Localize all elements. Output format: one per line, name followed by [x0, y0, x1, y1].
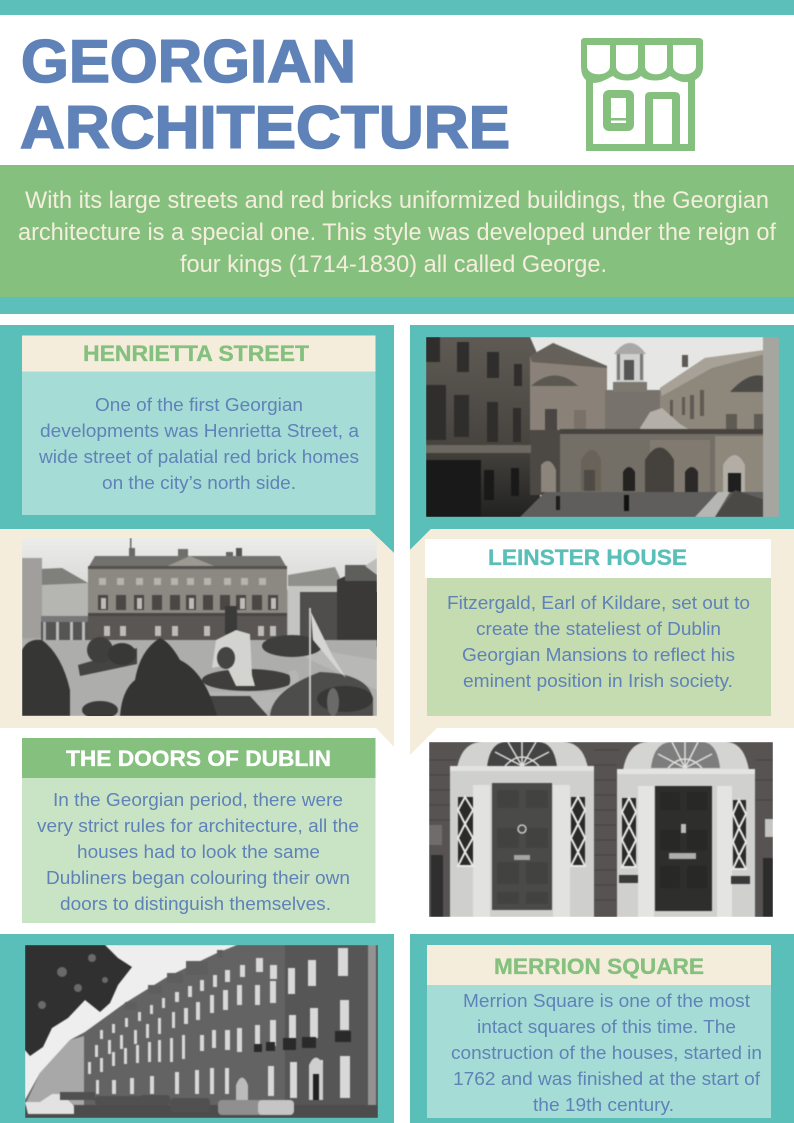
photo: Government Buildings courtyard [426, 337, 779, 517]
heading: Merrion Square: MERRION SQUARE [494, 954, 704, 979]
panel: Merrion Square [410, 934, 794, 1123]
title: GEORGIAN [21, 28, 356, 95]
text: Merrion Square: intact squares of this time. The [477, 1017, 736, 1037]
heading: The Doors of Dublin: THE DOORS OF DUBLIN [66, 746, 331, 771]
text: Merrion Square: the 19th century. [533, 1095, 674, 1115]
left sidelights [458, 797, 473, 866]
text: Leinster House [427, 578, 771, 716]
text: The Doors of Dublin: doors to distinguish themselves. [60, 894, 331, 914]
intro band: With its large streets and red bricks uniformized buildings, the Georgian [25, 187, 769, 214]
text: The Doors of Dublin: In the Georgian period, there were [53, 790, 343, 810]
panel: street photo [0, 934, 394, 1123]
right sidelights [622, 798, 636, 867]
text: Merrion Square: Merrion Square is one of the most [463, 991, 750, 1011]
heading: Leinster House: LEINSTER HOUSE [488, 545, 687, 570]
intro band: four kings (1714-1830) all called George. [180, 251, 607, 278]
text: The Doors of Dublin: Dubliners began colouring their own [46, 868, 350, 888]
text: Henrietta Street [22, 372, 376, 515]
text: Henrietta Street: developments was Henrietta Street, a [40, 421, 360, 441]
text: Merrion Square: construction of the houses, started in [451, 1043, 762, 1063]
text: Leinster House: Georgian Mansions to reflect his [462, 645, 735, 665]
text: Henrietta Street: on the city’s north side. [102, 473, 296, 493]
photo: terrace street [25, 945, 378, 1118]
text: The Doors of Dublin: houses had to look the same [77, 842, 320, 862]
panel: cream backing, left [0, 529, 394, 747]
title [20, 28, 510, 161]
text: Henrietta Street: One of the first Georgian [95, 395, 303, 415]
top teal bar [0, 0, 794, 15]
intro band: architecture is a special one. This style was developed under the reign of [18, 219, 776, 246]
title: ARCHITECTURE [20, 94, 510, 161]
text: Henrietta Street: wide street of palatial red brick homes [38, 447, 359, 467]
photo: Georgian doors [429, 742, 773, 917]
heading: Henrietta Street: HENRIETTA STREET [83, 341, 310, 366]
text: The Doors of Dublin [22, 778, 376, 923]
teal divider bar [0, 297, 794, 314]
panel: Henrietta Street [0, 325, 394, 553]
text: Leinster House: eminent position in Irish society. [463, 671, 733, 691]
text: The Doors of Dublin: very strict rules for architecture, all the [37, 816, 359, 836]
heading: Henrietta Street [22, 336, 376, 372]
text: Merrion Square [427, 985, 771, 1118]
panel: cream backing, right [410, 529, 794, 755]
heading: Merrion Square [427, 945, 771, 985]
intro band [0, 165, 794, 297]
text: Leinster House: create the stateliest of Dublin [476, 619, 721, 639]
icon: shop front [581, 38, 703, 151]
heading: The Doors of Dublin [22, 738, 376, 778]
heading: Leinster House [425, 539, 771, 578]
photo: Leinster House lawn [22, 538, 377, 716]
panel: Leinster House photo block [410, 325, 794, 550]
text: Merrion Square: 1762 and was finished at the start of [453, 1069, 761, 1089]
text: Leinster House: Fitzergald, Earl of Kildare, set out to [447, 593, 750, 613]
